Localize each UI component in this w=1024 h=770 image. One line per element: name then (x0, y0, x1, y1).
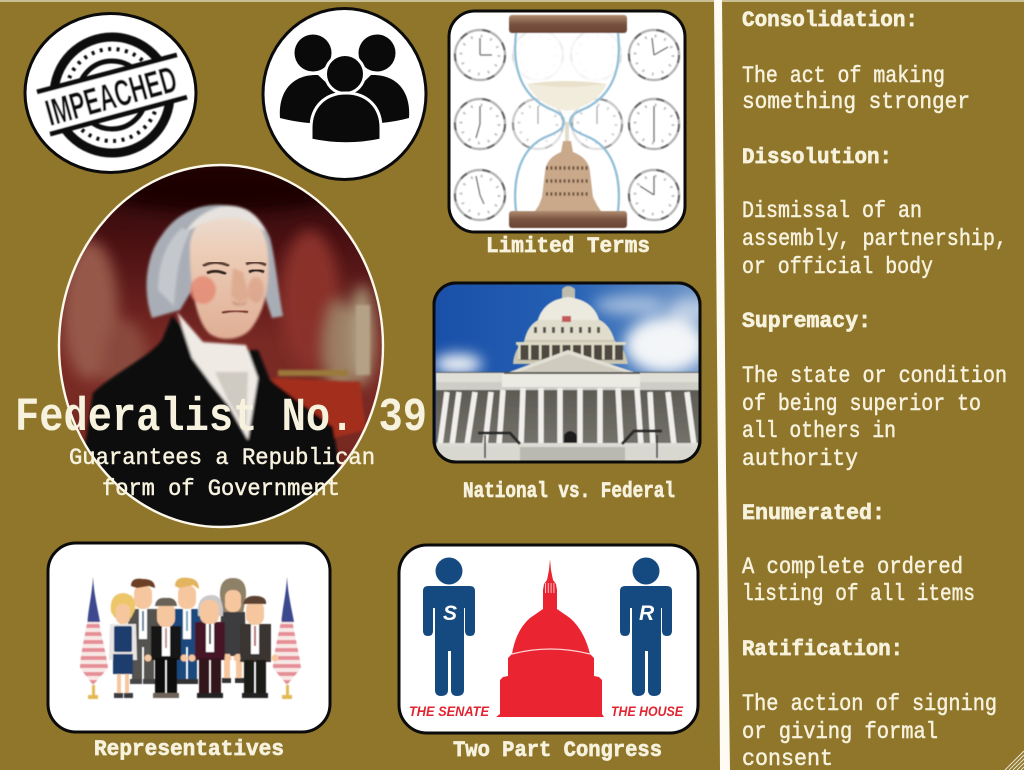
definition: enumerated (742, 501, 975, 607)
definition: ratification (742, 637, 997, 770)
subtitle: Guarantees a Republican (69, 445, 375, 471)
definition: consolidation: something stronger (742, 89, 970, 115)
label: two part congress: Two Part Congress (453, 738, 662, 763)
label: representatives: Representatives (94, 737, 284, 762)
face (190, 209, 268, 339)
definition: consolidation: The act of making (742, 63, 945, 89)
definition: enumerated: A complete ordered (742, 554, 963, 580)
definition: dissolution: or official body (742, 254, 933, 280)
chair (272, 378, 366, 446)
door (564, 430, 578, 444)
caps (509, 15, 627, 33)
coat (72, 316, 350, 530)
glass bulb (515, 33, 619, 211)
hair left lobe (147, 205, 283, 318)
dome (562, 286, 575, 299)
house caption: THE HOUSE (611, 703, 684, 719)
definition: dissolution: Dismissal of an (742, 198, 922, 224)
pediment (504, 350, 640, 374)
back row (128, 579, 160, 684)
capitol dome (496, 559, 604, 717)
label: national vs federal: National vs. Federal (463, 479, 675, 504)
figure: senate: S (443, 602, 457, 625)
front row (109, 593, 137, 698)
definition: enumerated: Enumerated: (742, 501, 885, 526)
figure: senate (423, 558, 475, 696)
definition: dissolution (742, 145, 1007, 280)
definition: supremacy: of being superior to (742, 391, 981, 417)
figure: house: R (639, 602, 655, 625)
clocks (455, 15, 679, 228)
icon: group of people (263, 8, 426, 180)
white vertical divider (714, 0, 730, 770)
facial features (203, 262, 266, 266)
definition: ratification: or giving formal (742, 719, 938, 745)
definition: consolidation: Consolidation: (742, 8, 918, 33)
corner resize hatch (1005, 751, 1024, 770)
definition: dissolution: Dissolution: (742, 145, 892, 170)
plinths and stairs (436, 443, 700, 447)
panel: capitol photo (434, 283, 712, 462)
subtitle (69, 445, 375, 502)
definition: ratification: Ratification: (742, 637, 903, 662)
figure: house (620, 558, 672, 696)
icon: impeached stamp: IMPEACHED (41, 58, 181, 134)
definition: supremacy (742, 309, 1007, 472)
definition: supremacy: authority (742, 446, 858, 472)
portrait: James Madison (50, 160, 390, 530)
definition: ratification: The action of signing (742, 691, 997, 717)
definition: consolidation (742, 8, 970, 115)
title: Federalist No. 39 (15, 392, 427, 445)
wings and wall (436, 371, 698, 444)
capitol in glass (535, 141, 601, 211)
panel: representatives (48, 543, 330, 732)
label: limited terms: Limited Terms (486, 234, 650, 259)
columns (440, 388, 694, 445)
definition: enumerated: listing of all items (742, 581, 975, 607)
definition: supremacy: all others in (742, 418, 896, 444)
flags (80, 577, 108, 685)
cravat (177, 312, 258, 440)
panel: two part congress (399, 545, 698, 733)
icon: impeached stamp (25, 14, 196, 172)
subtitle: form of Government (102, 476, 340, 502)
panel: limited terms hourglass (449, 11, 685, 232)
senate caption: THE SENATE (409, 703, 490, 719)
definition: supremacy: Supremacy: (742, 309, 871, 334)
